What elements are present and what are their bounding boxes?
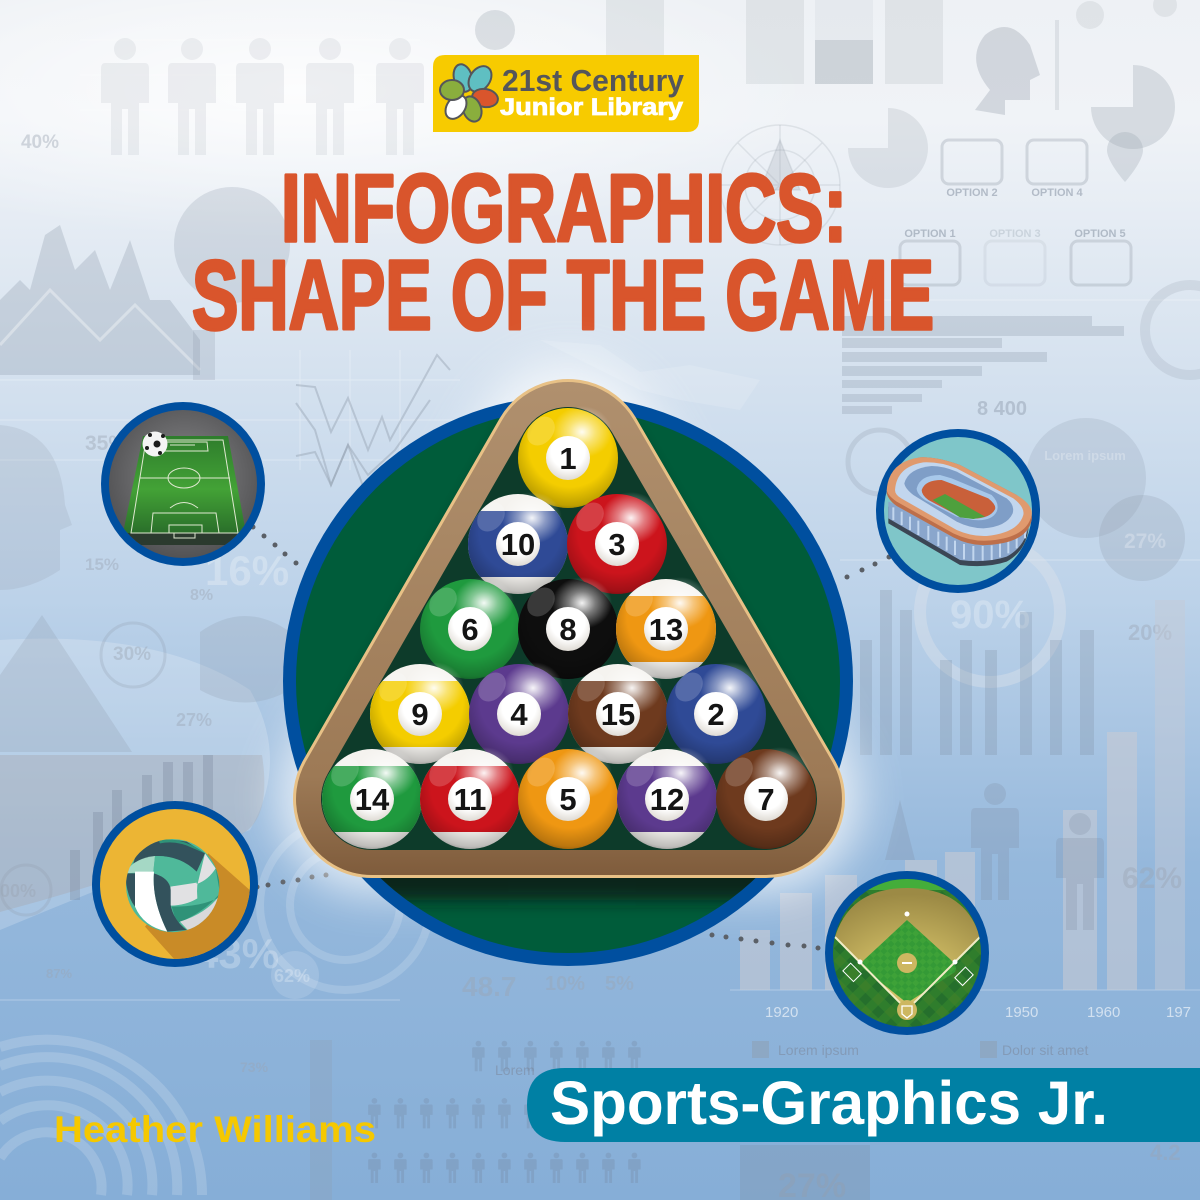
background: pale blue gradient with faint data graphics: 73%: [240, 1059, 269, 1075]
ball 9: 9: [411, 697, 429, 732]
ball 10: 10: [501, 527, 535, 562]
big green circle with blue ring: [283, 396, 853, 966]
line charts: [296, 355, 450, 500]
icon: volleyball: [92, 801, 258, 967]
ball 8: [518, 577, 618, 679]
ball 1: [518, 406, 618, 508]
billiard balls: [322, 406, 816, 849]
background: pale blue gradient with faint data graphics: OPTION 5: [1074, 228, 1126, 240]
author name: Heather Williams: [54, 1109, 376, 1150]
ball 3: [567, 492, 667, 594]
background: pale blue gradient with faint data graphics: 35%: [85, 432, 127, 455]
ball 13: 13: [649, 612, 683, 647]
background: pale blue gradient with faint data graphics: 15%: [85, 555, 119, 574]
left area and pie: [0, 225, 200, 375]
world map blob: [540, 340, 760, 410]
background: pale blue gradient with faint data graphics: OPTION 3: [989, 228, 1041, 240]
ball 11: 11: [454, 782, 486, 817]
logo: 21st Century Junior Library: [433, 55, 699, 132]
right horizontal bars: [842, 316, 1124, 414]
background: pale blue gradient with faint data graphics: 20%: [1128, 620, 1172, 645]
ball 14: 14: [355, 782, 390, 817]
background: pale blue gradient with faint data graphics: 5%: [605, 973, 634, 995]
background: pale blue gradient with faint data graphics: 00%: [0, 881, 36, 901]
background: pale blue gradient with faint data graphics: 90%: [950, 593, 1030, 637]
ball 5: [518, 747, 618, 849]
background: pale blue gradient with faint data graphics: 197: [1166, 1004, 1191, 1021]
ball 4: [469, 662, 569, 764]
background: pale blue gradient with faint data graphics: 62%: [1122, 862, 1182, 895]
background: pale blue gradient with faint data graphics: 62%: [274, 966, 310, 986]
ball 11: [420, 747, 520, 849]
ball 8: 8: [559, 612, 577, 647]
background: pale blue gradient with faint data graphics: 10%: [545, 973, 585, 995]
background: pale blue gradient with faint data graphics: 8%: [190, 587, 213, 604]
background: pale blue gradient with faint data graphics: Lorem: [495, 1062, 535, 1078]
background: pale blue gradient with faint data graphics: 16%: [205, 547, 289, 594]
concentric arcs: [0, 1040, 202, 1195]
background: pale blue gradient with faint data graphics: 8 400: [977, 398, 1027, 420]
background: pale blue gradient with faint data graphics: OPTION 1: [904, 228, 956, 240]
small people grid: [368, 1041, 641, 1183]
icon: stadium: [876, 429, 1040, 593]
background: pale blue gradient with faint data graphics: 1920: [765, 1004, 798, 1021]
icon: baseball field: [825, 871, 990, 1035]
icon: soccer field: [100, 400, 270, 570]
ball 2: [666, 662, 766, 764]
ball 15: 15: [601, 697, 635, 732]
ball 14: [322, 747, 422, 849]
ball 12: [617, 747, 717, 849]
background: pale blue gradient with faint data graphics: 87%: [46, 966, 72, 981]
series banner: Sports-Graphics Jr.: [550, 1069, 1108, 1137]
top bars: [475, 0, 1177, 188]
people row top: [101, 38, 424, 155]
ball 10: [468, 492, 568, 594]
option boxes: [900, 140, 1131, 285]
ball 6: [420, 577, 520, 679]
logo: 21st Century Junior Library: 21st Century: [502, 63, 685, 98]
background: pale blue gradient with faint data graphics: 4.2: [1150, 1140, 1181, 1165]
right circles and bars: [1026, 418, 1146, 538]
grid lines: [0, 40, 1200, 1000]
title: [192, 155, 934, 350]
ball 6: 6: [461, 612, 479, 647]
ball 5: 5: [559, 782, 577, 817]
background: pale blue gradient with faint data graphics: Lorem ipsum: [1044, 448, 1126, 463]
left head and shapes: [0, 425, 72, 590]
background: pale blue gradient with faint data graphics: Lorem ipsum: [778, 1042, 859, 1058]
background: pale blue gradient with faint data graphics: 27%: [1124, 530, 1166, 553]
background: pale blue gradient with faint data graphics: 48.7: [462, 971, 516, 1002]
background: pale blue gradient with faint data graphics: 43%: [195, 930, 279, 977]
background: pale blue gradient with faint data graphics: 40%: [21, 132, 59, 153]
dotted connectors: [250, 524, 892, 950]
wooden triangle rack: [372, 458, 766, 799]
ball 12: 12: [650, 782, 684, 817]
background: pale blue gradient with faint data graphics: 27%: [176, 710, 212, 730]
ball 2: 2: [707, 697, 725, 732]
background: pale blue gradient with faint data graphics: 30%: [113, 644, 151, 665]
ball 7: [716, 747, 816, 849]
ball 15: [568, 662, 668, 764]
icon: flower: [440, 62, 499, 124]
background: pale blue gradient with faint data graphics: 1960: [1087, 1004, 1120, 1021]
logo: 21st Century Junior Library: Junior Library: [500, 94, 684, 121]
background: pale blue gradient with faint data graphics: 1950: [1005, 1004, 1038, 1021]
ball 9: [370, 662, 470, 764]
ball 4: 4: [510, 697, 528, 732]
background: pale blue gradient with faint data graphics: OPTION 2: [946, 187, 998, 199]
ball 13: [616, 577, 716, 679]
ball 3: 3: [608, 527, 626, 562]
ball 1: 1: [559, 441, 577, 476]
rack shadow: [380, 878, 756, 910]
glow behind rack: [372, 458, 766, 799]
ball 7: 7: [757, 782, 775, 817]
background: pale blue gradient with faint data graphics: Dolor sit amet: [1002, 1042, 1088, 1058]
title: INFOGRAPHICS:: [281, 155, 847, 262]
background: pale blue gradient with faint data graphics: OPTION 4: [1031, 187, 1084, 199]
